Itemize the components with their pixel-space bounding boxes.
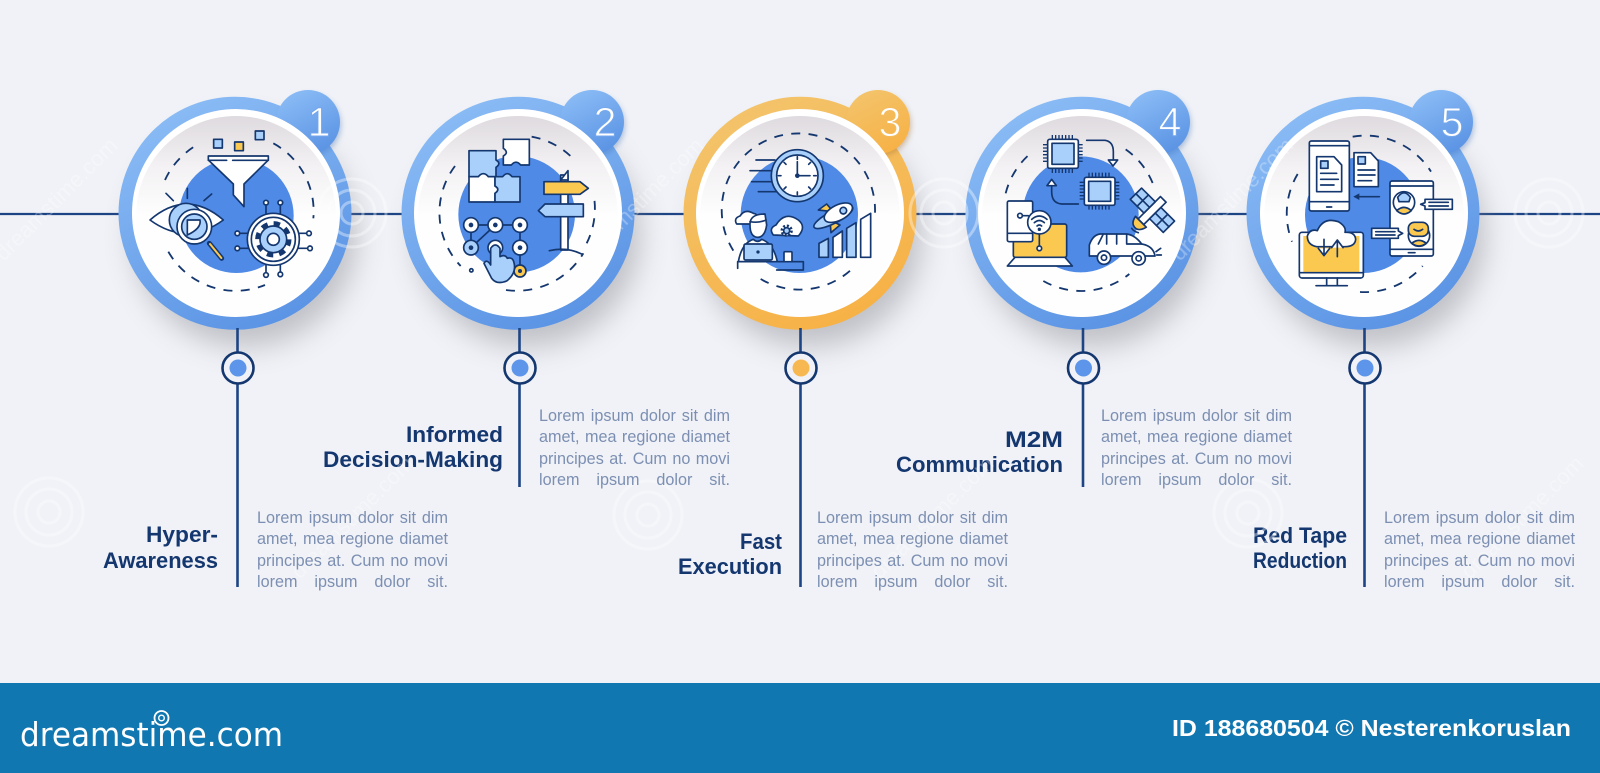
footer bar — [0, 683, 1600, 773]
step 2: ring: 2 — [594, 99, 616, 145]
text block: step 5: Lorem ipsum dolor sit dim — [1384, 509, 1575, 527]
step 5: ring: 5 — [1441, 99, 1463, 145]
watermark text: dreamstime.com — [866, 451, 999, 584]
icon 1: funnel, eye and gear — [150, 131, 314, 291]
step 4: connector and node — [1068, 328, 1099, 487]
heading: M2M Communication — [896, 427, 1063, 477]
step 3: ring — [684, 90, 922, 347]
heading: Informed Decision-Making: Informed — [406, 422, 503, 447]
heading: Red Tape Reduction: Reduction — [1253, 548, 1347, 573]
text block: step 2: principes at. Cum no movi — [539, 450, 730, 468]
text block: step 1: principes at. Cum no movi — [257, 552, 448, 570]
heading: Informed Decision-Making: Decision-Making — [323, 447, 503, 472]
text block: step 1 — [257, 509, 448, 591]
heading: Fast Execution — [678, 529, 783, 579]
heading: Hyper-Awareness — [103, 522, 218, 573]
watermark text: dreamstime.com — [1456, 451, 1589, 584]
step 4: ring: 4 — [1159, 99, 1181, 145]
icon 5: tablet documents, chat phone and cloud monitor — [1287, 136, 1452, 292]
text block: step 3: lorem ipsum dolor sit. — [817, 573, 1008, 591]
step 1: ring: 1 — [308, 99, 330, 145]
text block: step 2: lorem ipsum dolor sit. — [539, 471, 730, 489]
watermark text — [0, 133, 1589, 584]
horizontal timeline — [0, 213, 1600, 215]
step 3: connector and node — [786, 328, 816, 587]
heading: M2M Communication: M2M — [1005, 427, 1063, 452]
heading: Fast Execution: Fast — [740, 529, 783, 554]
text block: step 2 — [539, 407, 730, 489]
text block: step 1: amet, mea regione diamet — [257, 530, 448, 548]
step 1: ring — [118, 90, 357, 347]
heading: Red Tape Reduction: Red Tape — [1253, 523, 1347, 548]
step 4: ring — [966, 90, 1204, 347]
step 2: ring — [402, 90, 640, 347]
step 3: ring: 3 — [879, 99, 901, 145]
text block: step 3 — [817, 509, 1008, 591]
step 5: ring — [1246, 90, 1485, 347]
watermark text: dreamstime.com — [1166, 133, 1299, 266]
heading: Fast Execution: Execution — [678, 554, 782, 579]
watermark text: dreamstime.com — [576, 133, 709, 266]
watermark text: dreamstime.com — [286, 451, 419, 584]
text block: step 5 — [1384, 509, 1575, 591]
heading: M2M Communication: Communication — [896, 452, 1063, 477]
text block: step 2: Lorem ipsum dolor sit dim — [539, 407, 730, 425]
text block: step 4: lorem ipsum dolor sit. — [1101, 471, 1292, 489]
text block: step 3: Lorem ipsum dolor sit dim — [817, 509, 1008, 527]
watermarks — [15, 179, 1583, 549]
step 1: connector and node — [222, 328, 254, 587]
text block: step 1: Lorem ipsum dolor sit dim — [257, 509, 448, 527]
icon 4: chips, devices, satellite and car — [1006, 137, 1180, 291]
step 5: connector and node — [1350, 328, 1380, 587]
text block: step 4: amet, mea regione diamet — [1101, 428, 1292, 446]
text block: step 2: amet, mea regione diamet — [539, 428, 730, 446]
icon 3: clock, remote worker, rocket and bars — [722, 133, 875, 290]
step 2: connector and node — [504, 328, 536, 487]
text block: step 3: principes at. Cum no movi — [817, 552, 1008, 570]
text block: step 5: lorem ipsum dolor sit. — [1384, 573, 1575, 591]
heading: Informed Decision-Making — [323, 422, 503, 472]
heading: Red Tape Reduction — [1253, 523, 1347, 573]
heading: Hyper-Awareness: Awareness — [103, 548, 218, 573]
footer credit: ID 188680504 © Nesterenkoruslan — [1172, 715, 1571, 741]
text block: step 1: lorem ipsum dolor sit. — [257, 573, 448, 591]
text block: step 3: amet, mea regione diamet — [817, 530, 1008, 548]
text block: step 4 — [1101, 407, 1292, 489]
text block: step 5: amet, mea regione diamet — [1384, 530, 1575, 548]
text block: step 4: Lorem ipsum dolor sit dim — [1101, 407, 1292, 425]
text block: step 5: principes at. Cum no movi — [1384, 552, 1575, 570]
footer logo: dreamstime.com: dreamstime.com — [20, 715, 283, 754]
icon 2: puzzle, signpost and touch pattern — [439, 137, 595, 291]
text block: step 4: principes at. Cum no movi — [1101, 450, 1292, 468]
heading: Hyper-Awareness: Hyper- — [146, 522, 218, 547]
